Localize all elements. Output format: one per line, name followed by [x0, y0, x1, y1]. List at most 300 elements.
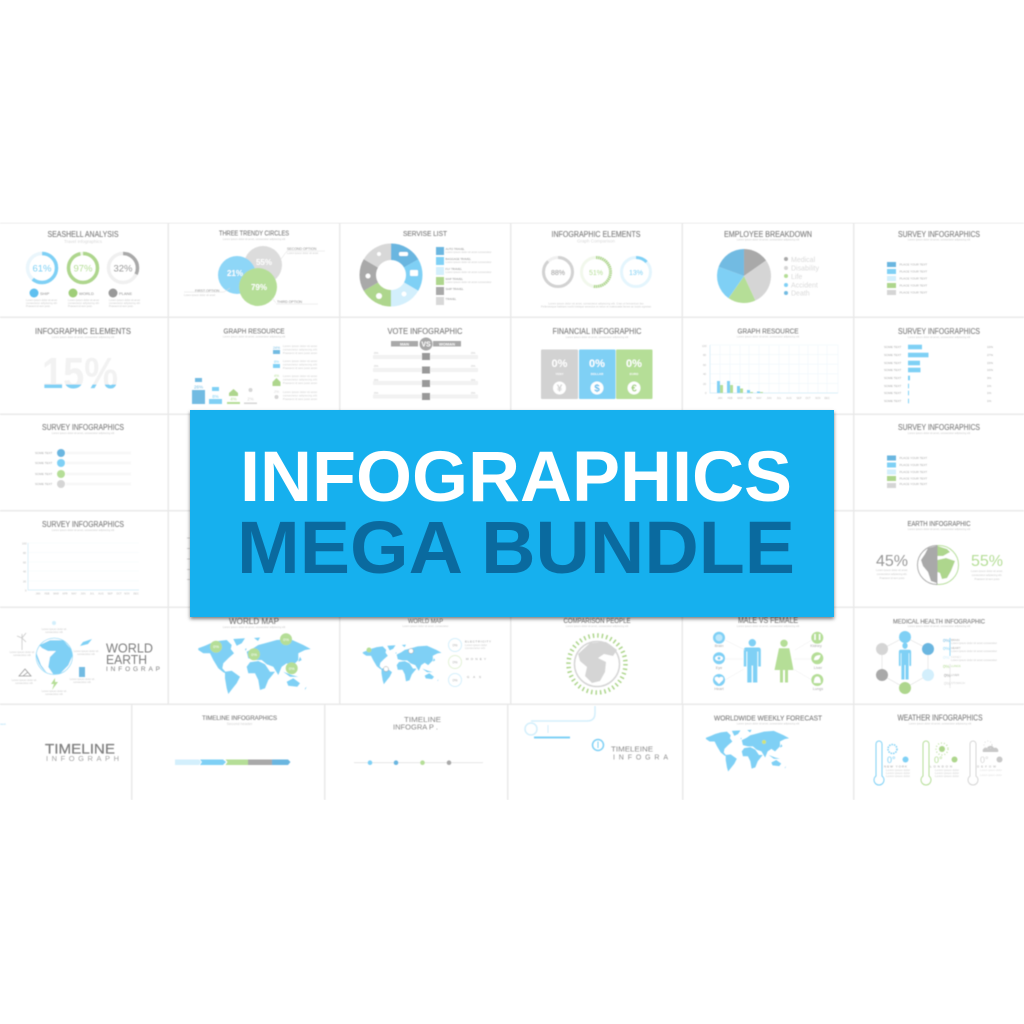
empty chart: MAR: [53, 592, 59, 596]
organ legend: BRAIN: [951, 638, 960, 642]
survey rows: PLACE YOUR TEXT: [900, 284, 927, 288]
stat: 55%: Praesent id sem justo: [975, 577, 1000, 581]
heading: MALE VS FEMALE: [738, 616, 798, 625]
heading: WORLD MAP: [229, 617, 279, 626]
venn circles: [218, 246, 282, 306]
organ legend: 0%: [943, 655, 950, 660]
donut: 61%: 61%: [32, 264, 52, 274]
thermometer: london: Lorem ipsum dolor: [935, 768, 959, 772]
organ legend: LUNGS: [951, 664, 961, 668]
survey rows: PLACE YOUR TEXT: [900, 476, 927, 480]
legend: ship world plane: SHIP: [40, 291, 50, 296]
vote rows: 0%: [374, 391, 379, 395]
panel: survey list top: [887, 230, 980, 295]
donut: 97%: 97%: [73, 264, 93, 274]
heading: WORLDWIDE WEEKLY FORECAST: [714, 716, 823, 722]
thermometer: snow: DEFOW: [977, 764, 996, 768]
organ legend: LIVER: [951, 673, 959, 677]
legend: ship world plane: consectetur adipiscing elit: [68, 301, 99, 305]
stat: 55%: Lorem ipsum dolor sit amet,: [971, 569, 1003, 573]
column chart: JUL: [777, 397, 782, 400]
service legend: Lorem ipsum dolor sit amet consectetur: [446, 270, 492, 274]
pie legend: Medical: [791, 257, 816, 264]
empty chart: 80: [23, 551, 27, 555]
description: Lorem ipsum dolor sit amet, consectetur adipiscing elit: [737, 722, 799, 726]
panel: vote infographic: [373, 327, 478, 400]
column chart: 40: [703, 372, 707, 376]
card: euro: €: [631, 384, 637, 394]
man vs woman header: VS: [421, 342, 431, 348]
column chart: SEP: [796, 397, 802, 400]
organ legend: Lorem ipsum dolor sit amet consectetur: [951, 658, 997, 662]
heading: [393, 715, 441, 732]
card: yen: YENY: [555, 372, 564, 376]
column chart: JUN: [767, 397, 772, 400]
icon list: 24%: [273, 346, 280, 350]
description: Lorem ipsum dolor sit amet, consectetur adipiscing elit: [737, 334, 799, 338]
service legend: BAGGAGE TRAVEL: [446, 257, 471, 261]
map pin: [762, 740, 766, 744]
survey rows: PLACE YOUR TEXT: [900, 470, 927, 474]
survey rows: PLACE YOUR TEXT: [900, 456, 927, 460]
description: Lorem ipsum dolor sit amet, consectetur adipiscing elit: [52, 528, 114, 532]
empty chart: FEB: [45, 592, 50, 596]
heading: seashell analysis: SEASHELL ANALYSIS: [48, 230, 118, 239]
panel: world map resources: [363, 619, 491, 686]
thermometer: london: [921, 741, 959, 785]
stat: 55%: consectetur adipiscing elit.: [972, 573, 1002, 577]
organ icons: Liver: [814, 666, 823, 670]
service legend: AUTO TRAVEL: [446, 247, 465, 251]
man vs woman header: WOMAN: [439, 342, 455, 346]
globe: [36, 638, 73, 674]
pie legend: Disability: [791, 266, 820, 272]
globe with tick ring: [568, 636, 626, 692]
man vs woman header: [391, 338, 461, 350]
empty chart: MAY: [71, 592, 77, 596]
empty chart: APR: [62, 592, 68, 596]
icon captions: consectetur elit: [77, 652, 95, 656]
world map: [363, 645, 441, 684]
stat circles: 0%: [452, 678, 458, 682]
stat circles: MONEY: [466, 657, 486, 661]
empty chart: 60: [23, 560, 27, 564]
card: dollar: $: [594, 384, 600, 394]
icon list: 4%: [274, 374, 279, 378]
column chart: 100: [702, 344, 707, 348]
description: Lorem ipsum dolor sit amet, consectetur adipiscing elit: [737, 238, 799, 242]
legend: ship world plane: [26, 288, 140, 308]
description: Lorem ipsum dolor sit amet, consectetur adipiscing elit: [908, 624, 970, 628]
card: dollar: DOLLAR: [591, 372, 604, 376]
option labels: Lorem ipsum dolor sit amet: [184, 293, 216, 297]
organ icons: Heart: [714, 687, 725, 691]
donut: 51%: 51%: [589, 270, 603, 277]
heading: VOTE INFOGRAPHIC: [388, 327, 463, 336]
horizontal bar chart: [884, 345, 993, 403]
service legend: TRAVEL: [446, 297, 457, 301]
organ legend: 0%: [944, 673, 951, 678]
stat circles: [448, 638, 491, 686]
heading: WEATHER INFOGRAPHICS: [898, 714, 982, 722]
empty chart: JAN: [36, 592, 41, 596]
icon list: consectetur adipiscing elit: [283, 348, 317, 352]
heading: GRAPH RESOURCE: [738, 328, 799, 336]
panel: timeline curve: [525, 706, 668, 762]
panel: survey list middle: [887, 423, 980, 488]
stat circles: ELECTRICITY: [465, 640, 491, 644]
heading: MEDICAL HEALTH INFOGRAPHIC: [893, 618, 985, 626]
legend: ship world plane: consectetur adipiscing elit: [26, 301, 57, 305]
survey rows: [35, 449, 131, 488]
panel: timeline title: [0, 722, 119, 763]
heading: SURVEY INFOGRAPHICS: [898, 327, 980, 336]
column chart: MAR: [737, 397, 743, 400]
bar chart: 4%: [230, 396, 237, 402]
column chart: APR: [746, 397, 752, 400]
heading: SURVEY INFOGRAPHICS: [42, 520, 124, 529]
stat: 45%: Lorem ipsum dolor sit amet,: [876, 568, 908, 572]
icon list: 8%: [274, 360, 279, 364]
stat circles: consectetur elit: [465, 646, 485, 650]
map pins: 0%: [213, 644, 219, 649]
survey rows: SOME TEXT: [35, 482, 52, 486]
card: dollar: 0%: [589, 358, 605, 370]
icon list: Praesent id sem justo amet: [283, 381, 317, 385]
heading: WORLD MAP: [408, 619, 443, 625]
subheading: Second header: [227, 722, 253, 726]
organ legend: 0%: [944, 681, 951, 686]
icon captions: consectetur elit: [15, 681, 33, 685]
column chart: 60: [703, 363, 707, 367]
empty chart: [22, 542, 139, 596]
panel: survey circles: [35, 423, 131, 488]
column chart: JAN: [718, 397, 723, 400]
world map: [198, 638, 311, 694]
dot timeline: [354, 760, 483, 765]
organ legend: 0%: [943, 664, 950, 669]
organ legend: KIDNEY: [951, 655, 962, 659]
banner background: [190, 410, 834, 617]
big number 15%: 15%: [42, 349, 118, 398]
empty chart: DEC: [133, 592, 139, 596]
heading: TIMELINE: [404, 715, 441, 724]
survey rows: PLACE YOUR TEXT: [900, 270, 927, 274]
heading: [611, 746, 668, 762]
horizontal bar chart: 3%: [987, 376, 992, 380]
horizontal bar chart: SOME TEXT: [884, 345, 901, 349]
horizontal bar chart: SOME TEXT: [884, 376, 901, 380]
heading: FINANCIAL INFOGRAPHIC: [552, 327, 642, 336]
card: yen: ¥: [557, 384, 563, 394]
bar chart: 2%: [247, 396, 254, 402]
column chart: NOV: [815, 397, 821, 400]
stat: 55%: 55%: [971, 553, 1003, 570]
service legend: Lorem ipsum dolor sit amet consectetur: [446, 280, 492, 284]
icon list: consectetur adipiscing elit: [283, 378, 317, 382]
description: Lorem ipsum dolor sit amet, consectetur adipiscing elit: [223, 625, 285, 629]
curve line: [525, 706, 595, 738]
service legend: MAP TRAVEL: [446, 277, 463, 281]
icon captions: consectetur elit: [45, 692, 63, 696]
icon list: Lorem ipsum dolor sit amet: [283, 390, 317, 394]
big number 15%: 15%: [42, 349, 118, 398]
thermometer: new york: NEW YORK: [884, 764, 907, 768]
female figure: [774, 640, 794, 682]
heading: servise list: SERVISE LIST: [403, 231, 448, 238]
empty chart: NOV: [124, 592, 130, 596]
thermometer: new york: Lorem ipsum dolor: [886, 774, 910, 778]
organ icons: Kidney: [810, 644, 822, 648]
heading: survey infographics: SURVEY INFOGRAPHICS: [898, 230, 980, 239]
map pins: 0%: [289, 666, 295, 671]
panel: graph resource icons: [192, 328, 317, 404]
heading: EARTH INFOGRAPHIC: [908, 521, 970, 528]
donut: 88%: 88%: [551, 270, 565, 277]
thermometer: snow: 0°: [980, 755, 989, 765]
icon captions: consectetur elit: [73, 680, 91, 684]
survey rows: SOME TEXT: [35, 451, 52, 455]
column chart: OCT: [805, 397, 811, 400]
icon list: Lorem ipsum dolor sit amet: [283, 374, 317, 378]
legend: ship world plane: Praesent id sem justo: [26, 304, 51, 308]
column chart: MAY: [756, 397, 762, 400]
stat circles: GAS: [467, 675, 481, 679]
horizontal bar chart: SOME TEXT: [884, 353, 901, 357]
organ legend: 0%: [943, 646, 950, 651]
panel: medical health: [876, 618, 997, 694]
panel: survey bars: [884, 327, 993, 403]
panel: world map pins: [198, 617, 311, 694]
icon list: Praesent id sem justo amet: [283, 397, 317, 401]
legend: ship world plane: WORLD: [79, 291, 94, 296]
hexagon of organs: [876, 631, 934, 694]
survey rows: [887, 456, 927, 488]
empty chart: JUN: [81, 592, 86, 596]
survey rows: [887, 262, 927, 295]
legend: ship world plane: Praesent id sem justo: [68, 304, 93, 308]
card: yen: 0%: [552, 358, 568, 370]
vote rows: 0%: [374, 364, 379, 368]
thermometer: new york: Lorem ipsum dolor: [886, 771, 910, 775]
thermometer: new york: Lorem ipsum dolor: [886, 768, 910, 772]
heading: world earth: WORLD: [106, 640, 153, 656]
service legend: Lorem ipsum dolor sit amet consectetur: [446, 260, 492, 264]
panel: survey line chart: [22, 520, 139, 596]
description: Lorem ipsum dolor sit amet, consectetur adipiscing elit: [908, 335, 970, 339]
stat: 45%: 45%: [876, 553, 908, 570]
icon captions: Lorem ipsum dolor sit: [10, 650, 35, 654]
survey rows: PLACE YOUR TEXT: [900, 290, 927, 294]
description: [541, 302, 652, 308]
description: Lorem ipsum dolor sit amet, consectetur adipiscing elit: [566, 335, 628, 339]
option labels: SECOND OPTION: [287, 247, 317, 251]
survey rows: SOME TEXT: [35, 472, 52, 476]
horizontal bar chart: 16%: [987, 368, 993, 372]
pie legend: Death: [791, 290, 810, 298]
vote rows: 0%: [471, 364, 476, 368]
stat circles: Lorem ipsum dolor: [465, 643, 487, 647]
subheading: infograph: INFOGRAPH: [46, 754, 119, 763]
icon captions: [10, 627, 99, 696]
heading: three trendy circles: THREE TRENDY CIRCLES: [219, 230, 289, 238]
map pins: [210, 633, 298, 674]
icon list: consectetur adipiscing elit: [283, 394, 317, 398]
donut chart: [359, 243, 423, 307]
pie legend: Life: [791, 274, 802, 281]
thermometer: snow: Lorem ipsum dolor: [980, 768, 1002, 772]
venn circles: 79%: [251, 283, 267, 292]
horizontal bar chart: SOME TEXT: [884, 368, 901, 372]
description: Lorem ipsum dolor sit amet, consectetur adipiscing elit: [908, 527, 970, 531]
subheading: travel infographics: Travel Infographics: [64, 239, 103, 244]
vote rows: 0%: [374, 351, 379, 355]
empty chart: JUL: [90, 592, 95, 596]
icon list: [272, 344, 317, 401]
horizontal bar chart: SOME TEXT: [884, 399, 901, 403]
option labels: FIRST OPTION: [195, 289, 220, 293]
man vs woman header: MAN: [400, 342, 409, 346]
infographic canvas: [0, 222, 1024, 800]
horizontal bar chart: SOME TEXT: [884, 361, 901, 365]
organ legend: Lorem ipsum dolor sit amet consectetur: [951, 641, 997, 645]
panel: earth infographic: [876, 521, 1003, 584]
horizontal bar chart: 1%: [987, 391, 992, 395]
heading: INFOGRAPHIC ELEMENTS: [35, 327, 131, 336]
icon list: Praesent id sem justo amet: [283, 351, 317, 355]
panel: three trendy circles: [184, 230, 325, 306]
organ icons: Lungs: [813, 687, 823, 691]
panel: seashell analysis: [26, 230, 140, 308]
panel: graph resource bars: [702, 328, 838, 400]
column chart: FEB: [728, 397, 733, 400]
heading: GRAPH RESOURCE: [224, 328, 285, 336]
organ legend: Lorem ipsum dolor sit amet consectetur: [951, 649, 997, 653]
card: euro: 0%: [626, 358, 642, 370]
icon captions: consectetur elit: [45, 630, 63, 634]
description: Lorem ipsum dolor sit amet, consectetur adipiscing elit: [52, 431, 114, 435]
column chart: AUG: [786, 397, 792, 400]
description: Lorem ipsum dolor sit amet, consectetur adipiscing elit. Cras ut fermentum leo: [548, 302, 644, 306]
survey rows: PLACE YOUR TEXT: [900, 262, 927, 266]
pie chart: [717, 249, 771, 303]
icon list: Praesent id sem justo amet: [283, 366, 317, 370]
card: yen: [541, 350, 578, 399]
icon captions: Lorem ipsum dolor sit: [42, 689, 67, 693]
icon captions: Lorem ipsum dolor sit: [12, 678, 37, 682]
icon list: 2%: [274, 390, 279, 394]
horizontal bar chart: 27%: [987, 353, 993, 357]
icon captions: consectetur elit: [13, 653, 31, 657]
map markers: [366, 648, 414, 672]
icon captions: Lorem ipsum dolor sit: [70, 677, 95, 681]
pie legend: [784, 257, 820, 298]
venn circles: 55%: [256, 258, 272, 267]
legend: ship world plane: PLANE: [119, 291, 132, 296]
organ legend: [943, 638, 997, 688]
organ legend: STOMACH: [951, 681, 965, 685]
heading: INFOGRA P .: [393, 722, 438, 732]
legend: ship world plane: Lorem ipsum dolor sit amet: [109, 298, 140, 302]
stat: 45%: Praesent id sem justo: [880, 576, 905, 580]
organ icons: [713, 632, 823, 691]
bar chart: 8%: [212, 394, 219, 399]
thermometer: london: Lorem ipsum dolor: [935, 771, 959, 775]
survey rows: SOME TEXT: [35, 461, 52, 465]
panel: servise list: [359, 231, 492, 307]
heading: world earth: [106, 640, 160, 673]
empty chart: AUG: [98, 592, 104, 596]
vote rows: 0%: [374, 378, 379, 382]
organ legend: 0%: [943, 638, 950, 643]
organ legend: HEART: [951, 646, 961, 650]
panel: worldwide weekly forecast: [706, 716, 823, 772]
legend: ship world plane: Praesent id sem justo: [109, 304, 134, 308]
vote rows: 0%: [471, 351, 476, 355]
globe split: [918, 546, 958, 584]
thermometer: new york: 0°: [887, 755, 896, 765]
legend: ship world plane: Lorem ipsum dolor sit amet: [68, 298, 99, 302]
male figure: [744, 639, 761, 682]
heading: TIMELEINE: [611, 746, 653, 754]
panel: infographic elements donuts: [541, 230, 652, 308]
heading: INFOGRA: [613, 754, 668, 762]
organ icons: Brain: [715, 644, 723, 648]
panel: timeline arrows: [175, 716, 290, 765]
horizontal bar chart: SOME TEXT: [884, 384, 901, 388]
description: Lorem ipsum dolor sit amet, consectetur: [402, 624, 449, 628]
heading: timeline: TIMELINE: [45, 740, 115, 756]
pie legend: Accident: [791, 282, 818, 290]
vote rows: 0%: [471, 378, 476, 382]
stat: 45%: [876, 553, 908, 580]
card: euro: EURO: [630, 372, 639, 376]
heading: TIMELINE INFOGRAPHICS: [202, 716, 277, 722]
horizontal bar chart: 1%: [987, 399, 992, 403]
map pins: 0%: [283, 637, 289, 642]
map pins: 0%: [251, 652, 257, 657]
big number 15%: [44, 358, 117, 390]
column chart: 0: [705, 391, 707, 395]
thermometer: snow: [968, 741, 1002, 785]
vote rows: [373, 351, 478, 400]
panel: timeline dots: [354, 715, 483, 765]
stray caption: next: [0, 722, 6, 726]
option labels: Lorem ipsum dolor sit amet: [287, 251, 319, 255]
description: Lorem ipsum dolor sit amet, consectetur adipiscing elit: [909, 722, 971, 726]
description: Lorem ipsum dolor sit amet, consectetur adipiscing elit: [223, 334, 285, 338]
icon list: consectetur adipiscing elit: [283, 362, 317, 366]
icon list: Lorem ipsum dolor sit amet: [283, 359, 317, 363]
survey rows: PLACE YOUR TEXT: [900, 276, 927, 280]
arrow timeline: [175, 760, 290, 765]
subheading: graph comparison: Graph Comparison: [577, 238, 615, 244]
icons around globe: [17, 621, 92, 690]
survey rows: PLACE YOUR TEXT: [900, 463, 927, 467]
service legend: FLY TRAVEL: [446, 267, 462, 271]
description: Pellentesque habitant morbi tristique senectus et netus et malesuada fames ac turpis egestas: [541, 304, 652, 308]
stat: 45%: consectetur adipiscing elit.: [877, 572, 907, 576]
panel: comparison people: [564, 618, 631, 692]
title line: infographics: INFOGRAPHICS: [240, 438, 792, 517]
stat: 55%: [971, 553, 1003, 581]
column chart: 80: [703, 353, 707, 357]
slide grid: [0, 222, 1024, 800]
description: Lorem ipsum dolor sit amet, consectetur adipiscing elit: [737, 624, 799, 628]
service legend: [436, 247, 492, 305]
thermometer: snow: Lorem ipsum dolor: [980, 773, 1002, 777]
title line: mega bundle: MEGA BUNDLE: [237, 506, 795, 589]
